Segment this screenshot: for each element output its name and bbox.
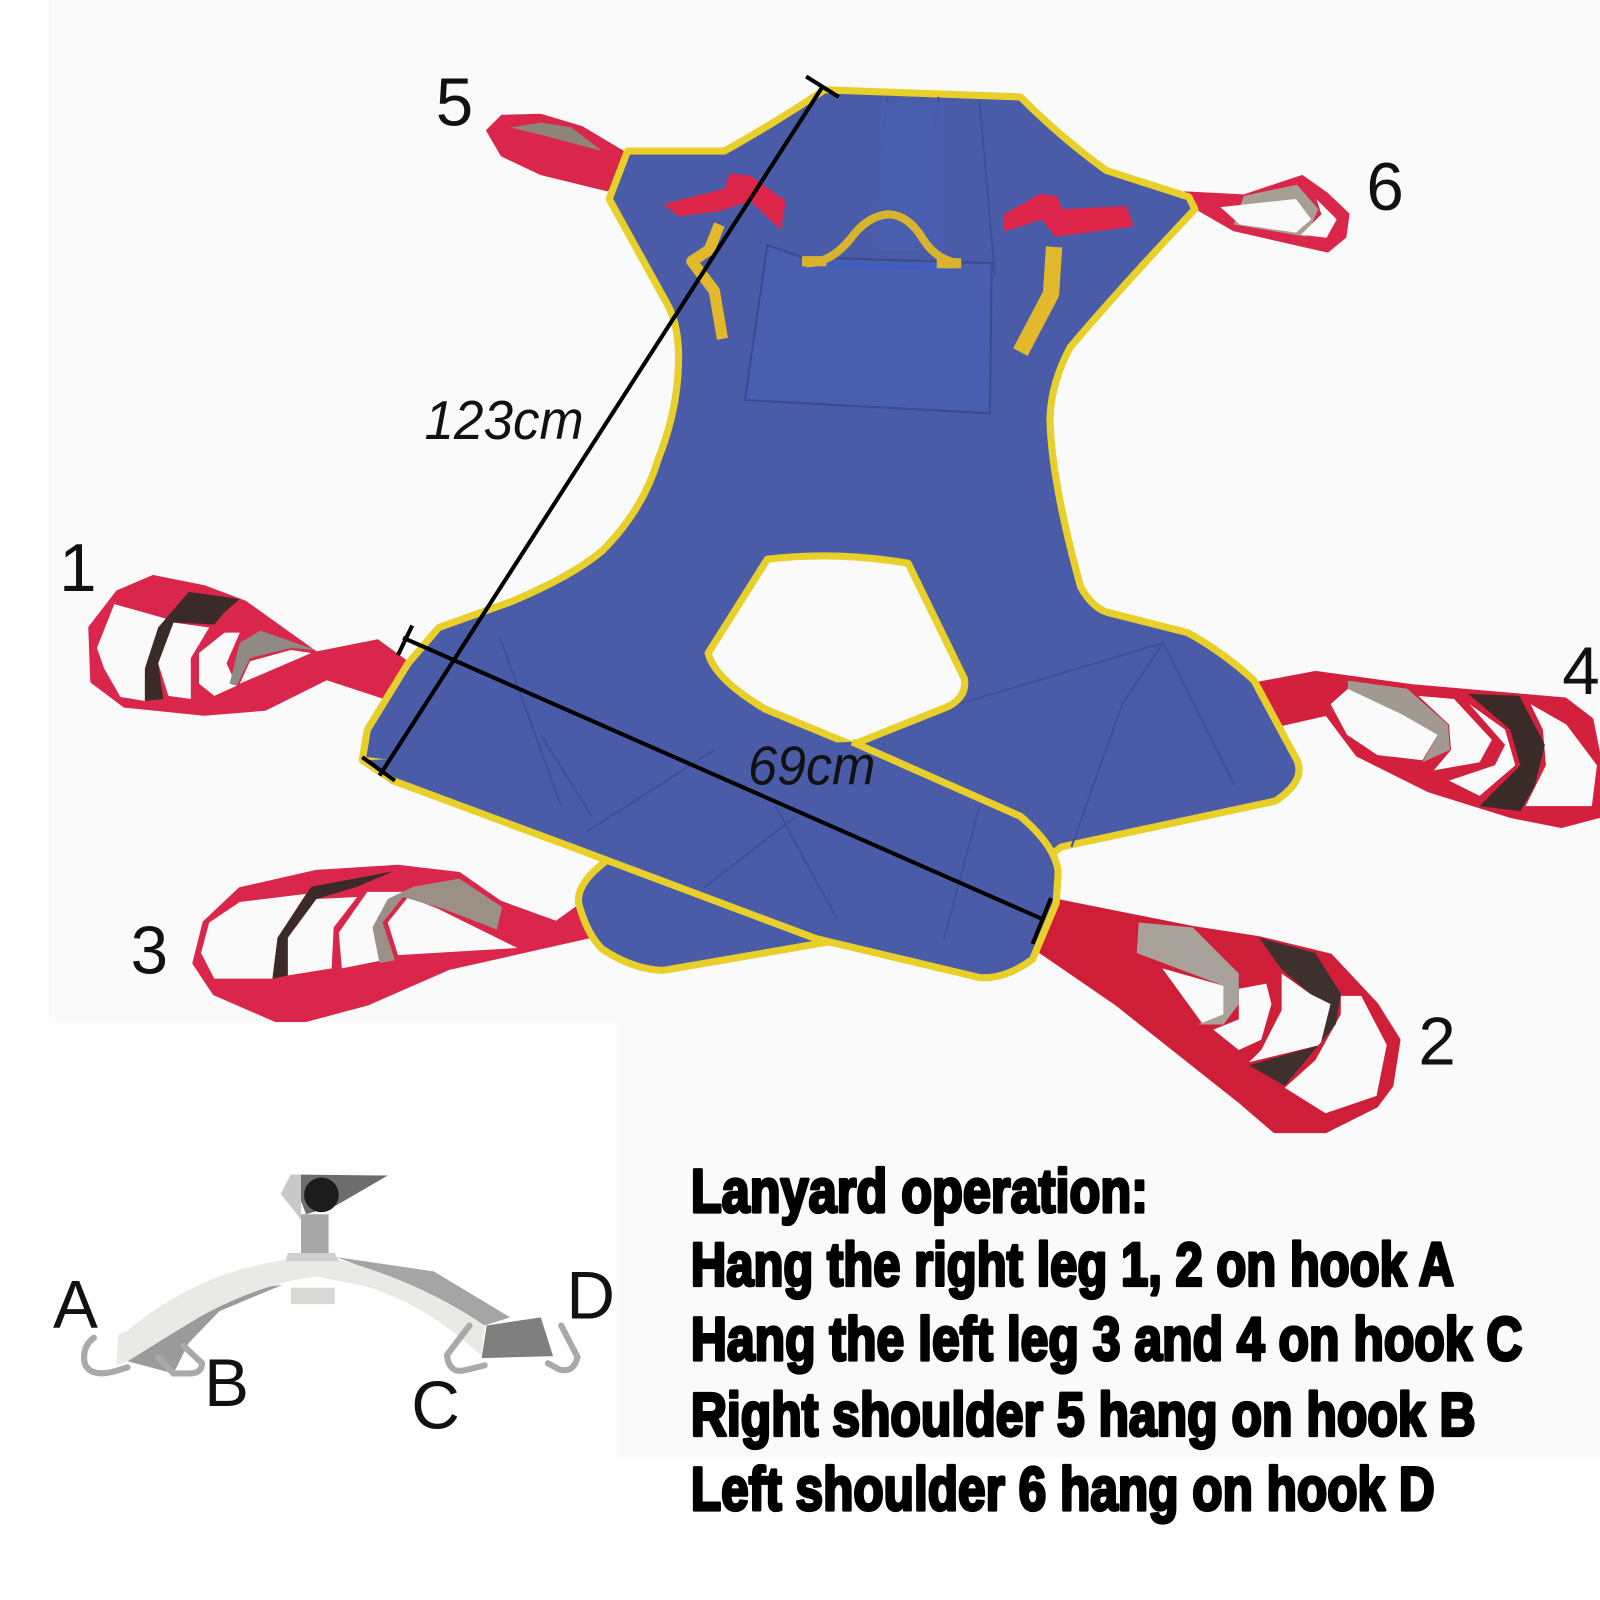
- seat hole: [708, 556, 965, 745]
- strap 3: left leg lower loop: [194, 866, 599, 1020]
- strap 1: right leg loop: [90, 577, 408, 714]
- left leg piece, front: [362, 638, 1058, 978]
- measurement: 123cm line: [362, 77, 839, 781]
- panel: hanger bar white background: [49, 1022, 616, 1457]
- lower leg flap: [578, 860, 847, 970]
- label: 123cm: 123cm: [424, 389, 584, 451]
- strap 4: left leg loop: [1256, 672, 1600, 827]
- headrest panel: [878, 102, 944, 250]
- text block: lanyard operation instructions: [691, 1157, 1522, 1523]
- label: hook B: B: [204, 1346, 249, 1421]
- strap 2: right leg lower loop: [1035, 899, 1399, 1132]
- shoulder straps yellow: [692, 224, 1054, 352]
- label: strap 4: 4: [1562, 634, 1600, 709]
- label: strap 3: 3: [131, 913, 168, 988]
- label: hook D: D: [566, 1258, 615, 1333]
- carry handle: [802, 214, 961, 268]
- shoulder straps red: [663, 173, 1134, 237]
- strap 5: right shoulder loop: [488, 115, 624, 190]
- label: strap 1: 1: [59, 531, 97, 606]
- heading: Lanyard operation:: [691, 1157, 1148, 1225]
- back panel seams: [883, 97, 1235, 847]
- instruction line 4: Left shoulder 6 hang on hook D: [691, 1455, 1435, 1523]
- label: strap 6: 6: [1366, 150, 1404, 225]
- icon: spreader bar hanger: [84, 1174, 578, 1373]
- label: hook C: C: [411, 1369, 460, 1444]
- label: strap 2: 2: [1418, 1004, 1456, 1079]
- pocket zip: [816, 264, 954, 268]
- label: strap 5: 5: [436, 66, 473, 141]
- strap 6: left shoulder loop: [1185, 177, 1348, 251]
- measurement: 69cm line: [398, 626, 1051, 944]
- back pocket: [745, 245, 992, 413]
- label: hook A: A: [53, 1268, 98, 1343]
- sling main body: [362, 90, 1299, 878]
- label: 69cm: 69cm: [748, 735, 876, 797]
